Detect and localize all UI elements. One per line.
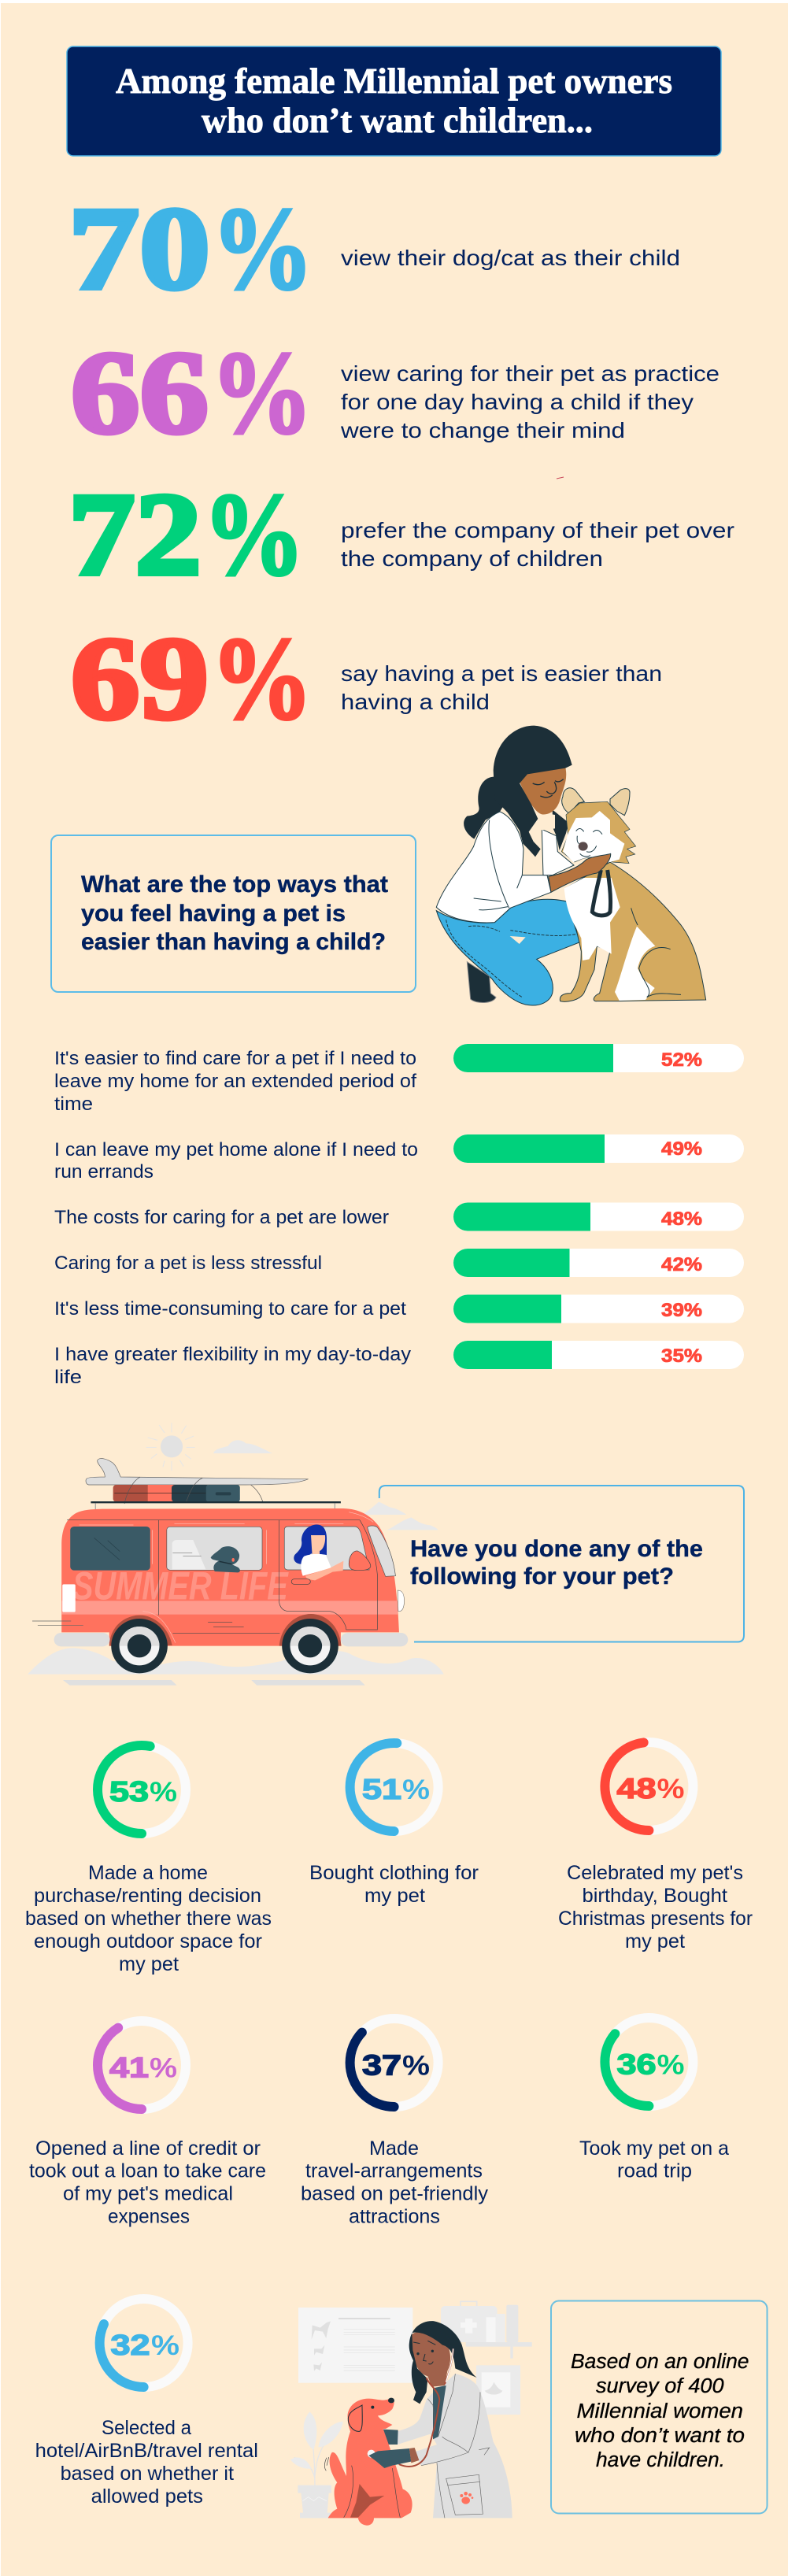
ring: 41% line of credit: of my pet's medical — [63, 2182, 233, 2204]
ring: 32% hotel rental: allowed pets — [91, 2485, 203, 2508]
ring: 36% road trip: Took my pet on a — [579, 2137, 729, 2160]
ring: 32% hotel rental — [35, 2299, 258, 2508]
ring: 36% road trip: road trip — [617, 2160, 692, 2182]
ring: 53% home decision: Made a home — [88, 1862, 208, 1884]
ring: 48% birthday: 48 — [617, 1772, 657, 1804]
vet far glove — [383, 2430, 398, 2445]
wall chart — [298, 2308, 412, 2383]
bar: 48%: The costs for caring for a pet are lower — [54, 1207, 389, 1228]
van body — [61, 1508, 399, 1646]
jeans seams — [446, 920, 576, 997]
ring: 32% hotel rental: 32 — [110, 2329, 150, 2361]
ring: 37% travel arrangements: attractions — [349, 2206, 440, 2228]
dog nose — [579, 842, 588, 851]
bar: 52%: It's easier to find care for a pet if I need to — [54, 1048, 416, 1069]
question box: have you done: following for your pet? — [410, 1564, 674, 1590]
woman's hair back — [464, 777, 516, 839]
bar: 35%: life — [54, 1367, 82, 1388]
rear wheel — [111, 1619, 168, 1673]
stat: 70%: view their dog/cat as their child — [341, 246, 680, 270]
bar: 35%: 35% — [661, 1345, 702, 1367]
luggage — [113, 1477, 263, 1504]
front wheel — [282, 1619, 339, 1673]
ring: 51% clothing: 51 — [362, 1773, 401, 1805]
ground hills — [28, 1648, 444, 1675]
ring: 48% birthday — [558, 1742, 753, 1952]
headlight — [398, 1590, 404, 1612]
survey note box: survey of 400 — [596, 2375, 724, 2397]
dog head white — [563, 811, 624, 862]
face features — [533, 779, 564, 798]
ring: 41% line of credit — [29, 2021, 266, 2228]
survey note box: Based on an online — [571, 2351, 749, 2373]
vet shirt — [433, 2385, 446, 2439]
bar chart: ways a pet is easier — [54, 1044, 744, 1388]
ring: 51% clothing: Bought clothing for — [309, 1862, 479, 1884]
ring: 37% travel arrangements: travel-arrangements — [305, 2160, 483, 2182]
van lettering: SUMMER LIFE — [72, 1564, 289, 1608]
title banner: Among female Millennial pet owners — [116, 61, 672, 101]
chest piece — [368, 2450, 376, 2458]
front bumper — [341, 1633, 408, 1646]
dog belly white — [615, 927, 655, 1001]
stethoscope — [399, 2348, 453, 2467]
shelf — [466, 2342, 532, 2359]
stat: 66%: 66 — [71, 328, 209, 458]
ring: 53% home decision — [25, 1745, 272, 1975]
gap between legs — [510, 936, 526, 944]
bar: 42% — [54, 1249, 744, 1277]
ring: 41% line of credit: Opened a line of credit or — [35, 2137, 261, 2160]
coat lines — [421, 2374, 490, 2518]
dog's contour lines — [324, 2457, 400, 2518]
ring: 32% hotel rental: % — [151, 2330, 179, 2361]
question box: top ways: easier than having a child? — [81, 929, 386, 955]
vet wrist — [409, 2448, 419, 2463]
ring: 41% line of credit: expenses — [108, 2206, 190, 2228]
ring: 48% birthday: my pet — [625, 1930, 685, 1952]
stat: 70%: % — [212, 183, 313, 314]
vet neck and face — [412, 2332, 450, 2387]
ring: 36% road trip — [579, 2018, 729, 2182]
bar: 52%: leave my home for an extended period of — [54, 1071, 416, 1092]
stat: 72%: % — [203, 469, 305, 600]
stat: 72%: the company of children — [341, 546, 603, 571]
question box: have you done: Have you done any of the — [410, 1536, 703, 1562]
stripe — [61, 1601, 398, 1615]
hair front — [494, 726, 572, 857]
dog's belly shade — [350, 2484, 384, 2518]
boot — [467, 962, 496, 1003]
ring: 48% birthday: Christmas presents for — [558, 1908, 753, 1930]
ring: 51% clothing: % — [402, 1775, 430, 1805]
dog left ear — [562, 788, 584, 813]
ring: 41% line of credit: % — [150, 2053, 177, 2083]
bar: 52%: 52% — [661, 1049, 702, 1071]
bar: 52%: time — [54, 1094, 93, 1115]
sweater lines — [474, 820, 522, 910]
stat: 66%: view caring for their pet as practice — [341, 361, 720, 386]
question box: top ways: you feel having a pet is — [81, 901, 346, 927]
clouds — [213, 1440, 438, 1530]
woman's arm and hand — [549, 853, 611, 892]
stat: 66%: % — [211, 328, 313, 458]
middle window — [167, 1527, 262, 1570]
title banner: who don’t want children... — [202, 101, 593, 140]
ring: 51% clothing — [309, 1743, 479, 1907]
ring: 41% line of credit: took out a loan to take care — [29, 2160, 266, 2182]
ring: 53% home decision: based on whether there was — [25, 1908, 272, 1930]
windshield — [368, 1526, 395, 1576]
speed lines — [32, 1621, 83, 1625]
body highlights — [80, 1512, 373, 1643]
bar: 39% — [54, 1294, 744, 1323]
illustration: vet examining dog — [290, 2301, 532, 2526]
vet glove — [368, 2448, 411, 2468]
ring: 32% hotel rental: Selected a — [102, 2417, 191, 2439]
wheel arches — [109, 1614, 342, 1646]
sweater front — [542, 829, 574, 875]
front window — [284, 1527, 369, 1570]
question box: top ways: What are the top ways that — [81, 872, 388, 898]
bar: 48%: 48% — [661, 1208, 702, 1230]
dog — [328, 2398, 412, 2526]
vet face features — [413, 2341, 435, 2364]
roof rack — [91, 1501, 341, 1503]
survey note box: who don’t want to — [575, 2425, 745, 2447]
title banner — [67, 46, 721, 156]
dog's ear — [348, 2405, 362, 2431]
ring: 53% home decision: purchase/renting decision — [34, 1885, 261, 1907]
ring: 53% home decision: enough outdoor space for — [34, 1930, 262, 1952]
bar: 49%: I can leave my pet home alone if I need to — [54, 1139, 418, 1160]
bar: 42%: 42% — [661, 1254, 702, 1275]
sweater — [436, 812, 551, 923]
bar: 42%: Caring for a pet is less stressful — [54, 1253, 322, 1274]
scarf — [535, 812, 555, 830]
stat: 66% — [71, 328, 720, 458]
tail light — [62, 1584, 76, 1612]
stat: 69%: % — [211, 613, 313, 744]
ring: 53% home decision: my pet — [119, 1953, 179, 1975]
stat: 69%: having a child — [341, 690, 490, 714]
question box: have you done — [379, 1486, 744, 1642]
survey note box: Millennial women — [576, 2400, 743, 2422]
stat: 69%: say having a pet is easier than — [341, 661, 662, 686]
hair behind neck — [553, 809, 568, 850]
surfboard — [86, 1459, 309, 1485]
stat: 69%: 69 — [71, 613, 209, 744]
rear window — [70, 1527, 150, 1571]
ring: 48% birthday: % — [657, 1774, 685, 1804]
ring: 51% clothing: my pet — [364, 1885, 425, 1907]
stat: 66%: for one day having a child if they — [341, 390, 694, 414]
bar: 35%: I have greater flexibility in my day-to-day — [54, 1344, 412, 1365]
plant — [290, 2411, 343, 2518]
face — [520, 768, 566, 814]
dog in window — [211, 1546, 240, 1572]
sun — [146, 1423, 195, 1471]
road dashes — [63, 1680, 365, 1686]
ring: 37% travel arrangements: % — [402, 2050, 430, 2082]
dog eyes and smile — [576, 828, 602, 857]
ring: 37% travel arrangements: Made — [369, 2137, 419, 2160]
stat: 70% — [68, 183, 680, 314]
stat: 72%: 72 — [68, 469, 202, 600]
illustration: woman hugging dog — [436, 726, 706, 1005]
rear bumper — [54, 1633, 110, 1646]
side mirror — [349, 1551, 371, 1571]
bar: 49%: run errands — [54, 1161, 154, 1183]
dog head tan — [561, 801, 636, 864]
bar: 52% — [54, 1044, 744, 1115]
ring: 53% home decision: % — [150, 1777, 177, 1808]
stat: 72%: prefer the company of their pet over — [341, 518, 734, 542]
dog's eye — [371, 2406, 374, 2409]
ring: 48% birthday: Celebrated my pet's — [567, 1862, 743, 1884]
ring: 32% hotel rental: based on whether it — [61, 2463, 234, 2485]
ring: 36% road trip: % — [657, 2050, 685, 2080]
framed picture — [476, 2365, 520, 2415]
stat: 66%: were to change their mind — [340, 418, 625, 442]
stat: 70%: 70 — [68, 183, 210, 314]
dog haunch line — [631, 908, 681, 997]
ring: 36% road trip: 36 — [617, 2049, 657, 2080]
bar: 39%: 39% — [661, 1300, 702, 1321]
stray red mark — [557, 477, 564, 479]
stat: 69% — [71, 613, 662, 744]
dog body — [560, 862, 706, 1001]
ring: 37% travel arrangements — [301, 2019, 489, 2228]
dog's nose — [388, 2398, 394, 2403]
survey note box: have children. — [596, 2449, 725, 2471]
dog chest white — [564, 878, 620, 960]
pocket paw — [460, 2492, 473, 2504]
bar: 35% — [54, 1341, 744, 1388]
ring: 48% birthday: birthday, Bought — [583, 1885, 727, 1907]
vet hair — [409, 2321, 477, 2404]
ring: 32% hotel rental: hotel/AirBnB/travel rental — [35, 2440, 258, 2462]
bar: 49%: 49% — [661, 1138, 702, 1160]
ring: 37% travel arrangements: 37 — [362, 2049, 401, 2082]
woman's jeans — [436, 899, 580, 1005]
first aid kit and bottles — [441, 2301, 518, 2342]
woman driver — [294, 1524, 343, 1580]
door handle — [291, 1579, 310, 1584]
leash — [592, 870, 611, 916]
bar: 49% — [54, 1134, 744, 1183]
ring: 37% travel arrangements: based on pet-friendly — [301, 2182, 489, 2204]
dog right ear — [610, 789, 630, 816]
survey note box — [551, 2300, 767, 2513]
vet coat — [398, 2374, 512, 2518]
bar: 39%: It's less time-consuming to care for a pet — [54, 1298, 406, 1319]
question box: top ways — [51, 835, 416, 992]
body lines — [67, 1520, 377, 1633]
ring: 41% line of credit: 41 — [109, 2052, 149, 2083]
ring: 53% home decision: 53 — [109, 1775, 149, 1808]
stat: 72% — [68, 469, 734, 600]
illustration: summer van with woman and dog — [28, 1423, 444, 1686]
bar: 48% — [54, 1203, 744, 1231]
